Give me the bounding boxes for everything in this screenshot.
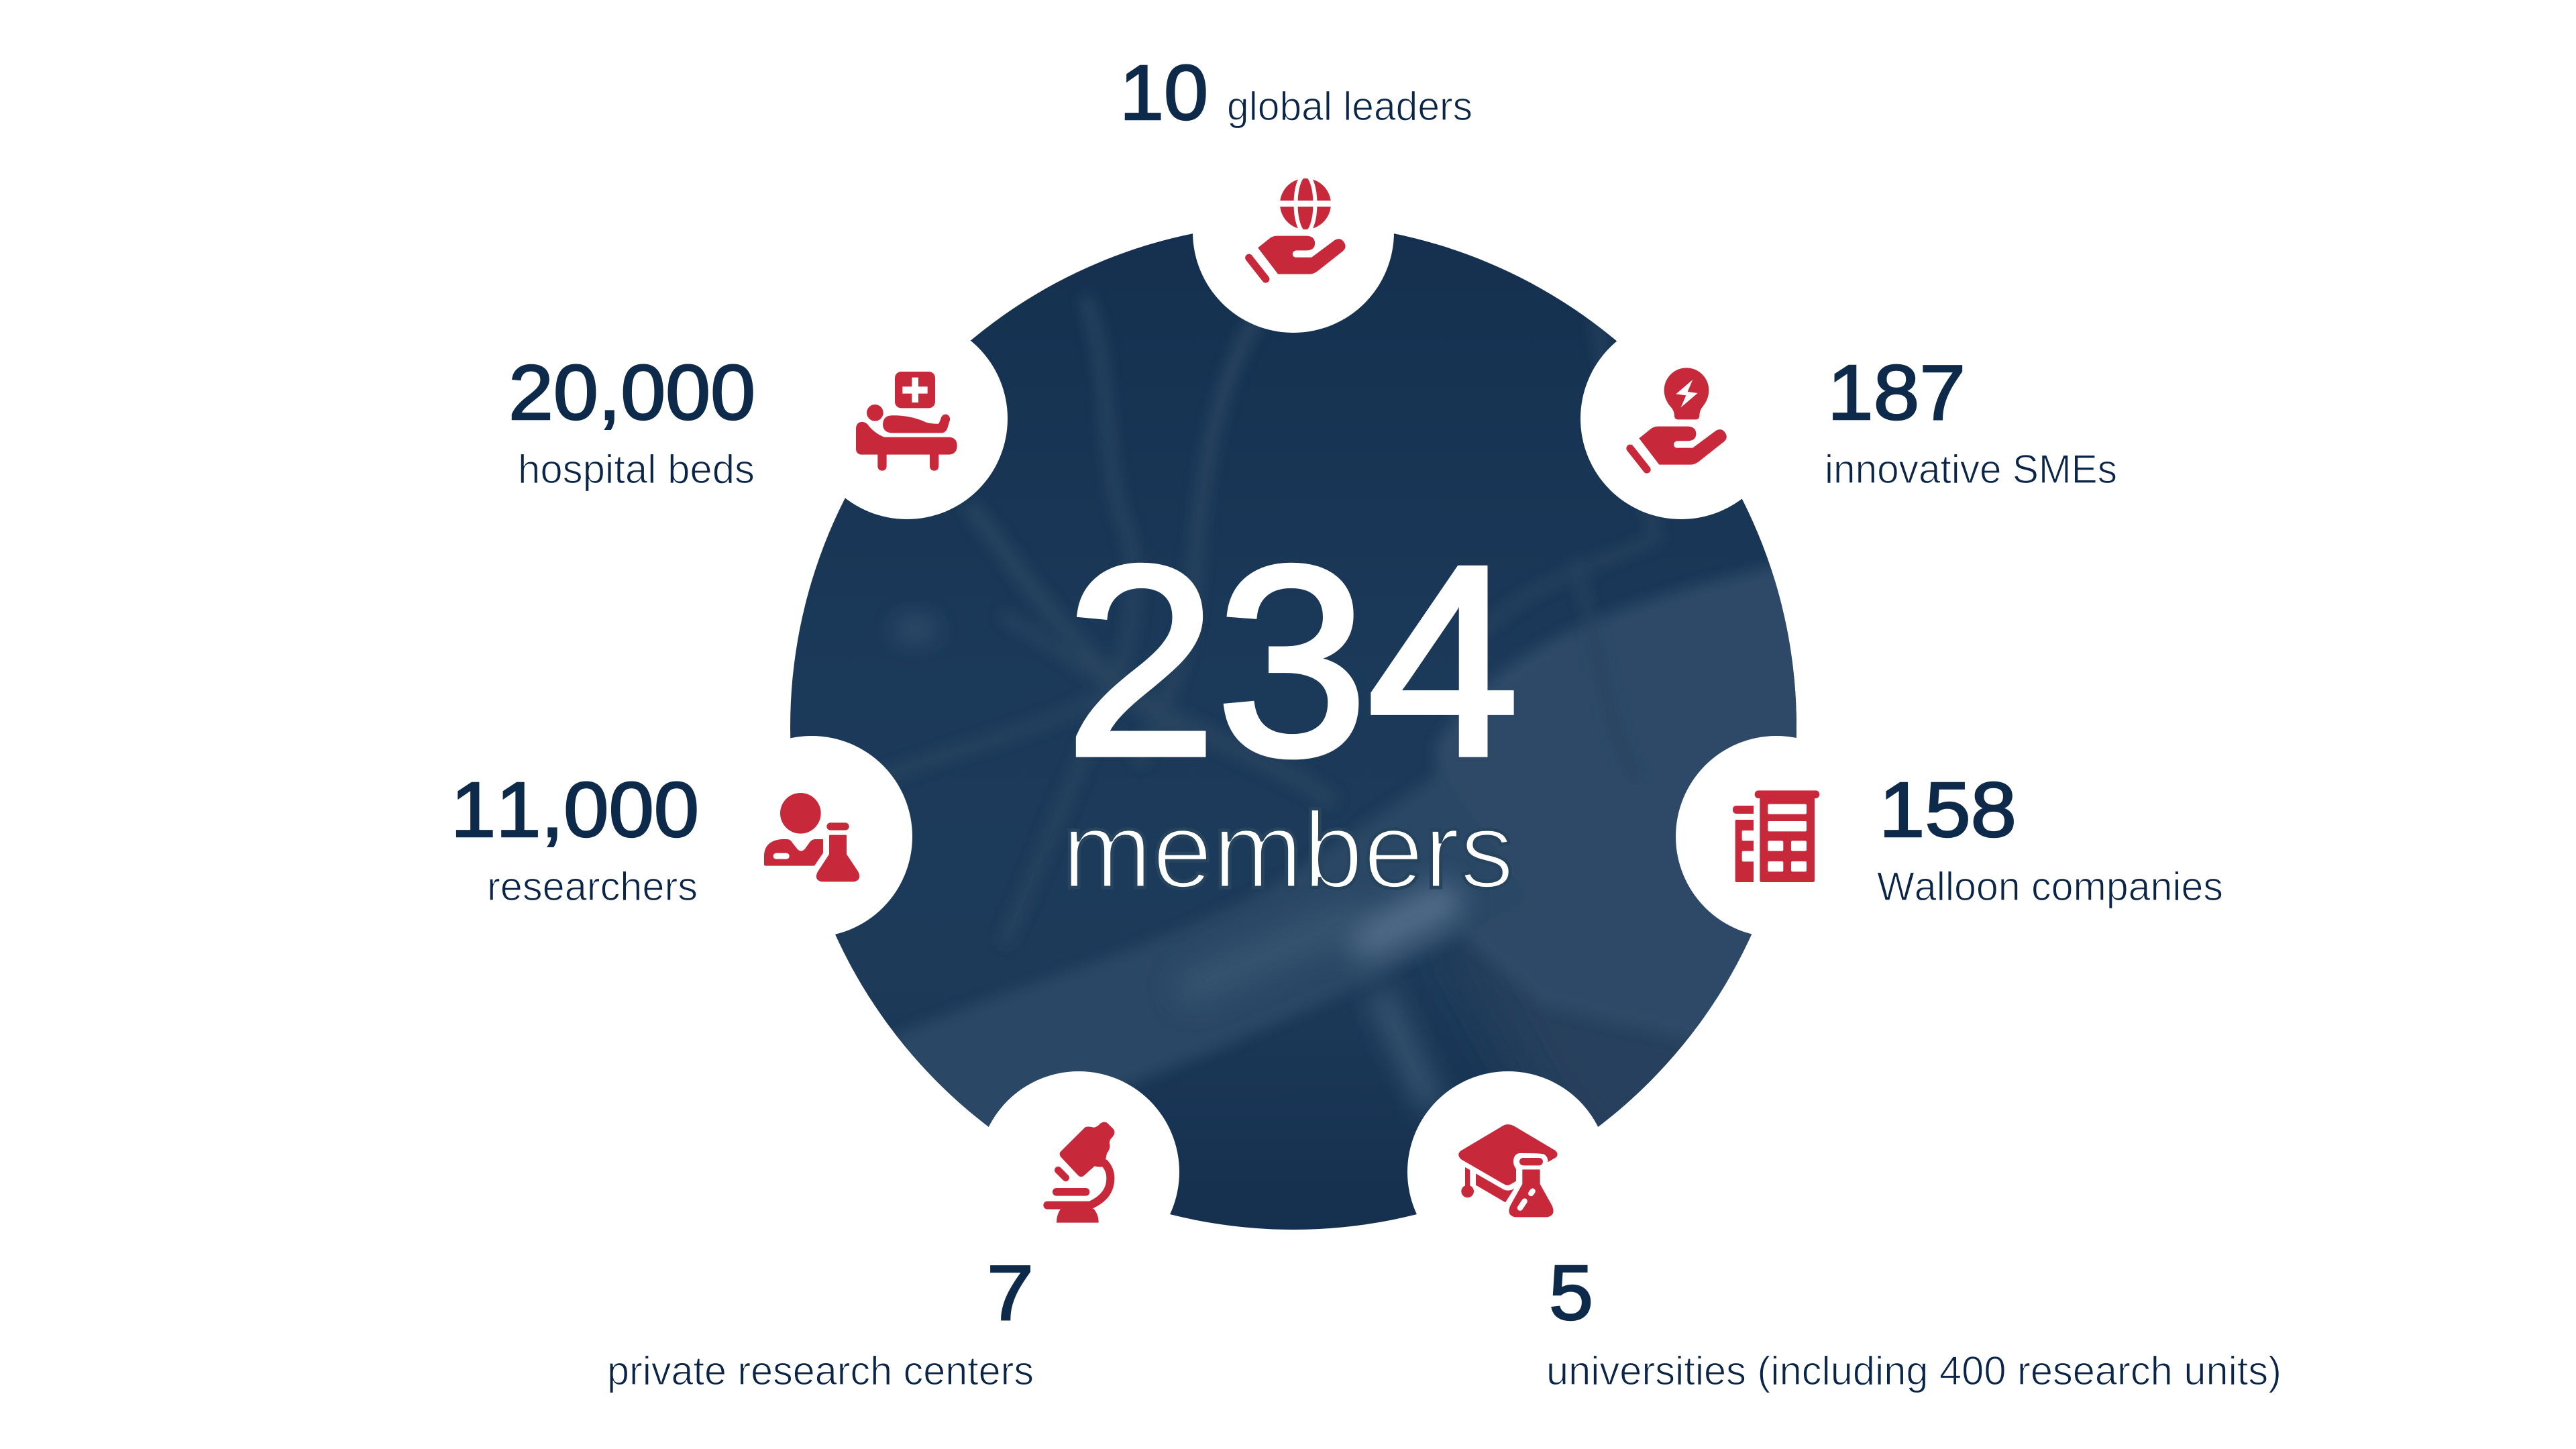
stat: Walloon companies: Walloon companies bbox=[1877, 864, 2223, 909]
icon: light bulb on hand bbox=[1630, 368, 1727, 470]
icon: microscope bbox=[1047, 1122, 1114, 1223]
stat: innovative SMEs: 187 bbox=[1827, 349, 1966, 436]
stat: universities: 5 bbox=[1549, 1249, 1593, 1336]
stat: global leaders: global leaders bbox=[1227, 84, 1472, 129]
icon: researcher with flask bbox=[764, 793, 859, 881]
stat: researchers: researchers bbox=[487, 864, 698, 909]
stat: private research centers: private research centers bbox=[607, 1348, 1034, 1393]
stat: private research centers bbox=[607, 1249, 1034, 1393]
stat: hospital beds bbox=[508, 349, 755, 492]
stat: researchers: 11,000 bbox=[451, 766, 699, 853]
icon: company buildings bbox=[1733, 790, 1819, 882]
icon: graduation cap with flask bbox=[1458, 1124, 1558, 1217]
stat: private research centers: 7 bbox=[987, 1249, 1034, 1336]
icon: hospital bed bbox=[856, 372, 957, 471]
stat: universities bbox=[1546, 1249, 2282, 1393]
central disc with micrograph texture bbox=[785, 221, 1825, 1234]
centre total number: 234 bbox=[1065, 511, 1519, 812]
stat: global leaders bbox=[1120, 49, 1472, 136]
stat: Walloon companies bbox=[1877, 766, 2223, 909]
stat: innovative SMEs: innovative SMEs bbox=[1825, 447, 2117, 492]
stat: Walloon companies: 158 bbox=[1879, 766, 2017, 853]
stat: innovative SMEs bbox=[1825, 349, 2117, 492]
icon: globe on hand bbox=[1249, 175, 1346, 279]
white notch circles around disc bbox=[711, 131, 1877, 1273]
stat: hospital beds: hospital beds bbox=[518, 447, 755, 492]
stat: hospital beds: 20,000 bbox=[508, 349, 755, 436]
stat: universities: universities (including 400 research units) bbox=[1546, 1348, 2282, 1393]
stat: global leaders: 10 bbox=[1120, 49, 1208, 136]
centre label: members: members bbox=[1062, 790, 1514, 911]
stat: researchers bbox=[451, 766, 699, 909]
